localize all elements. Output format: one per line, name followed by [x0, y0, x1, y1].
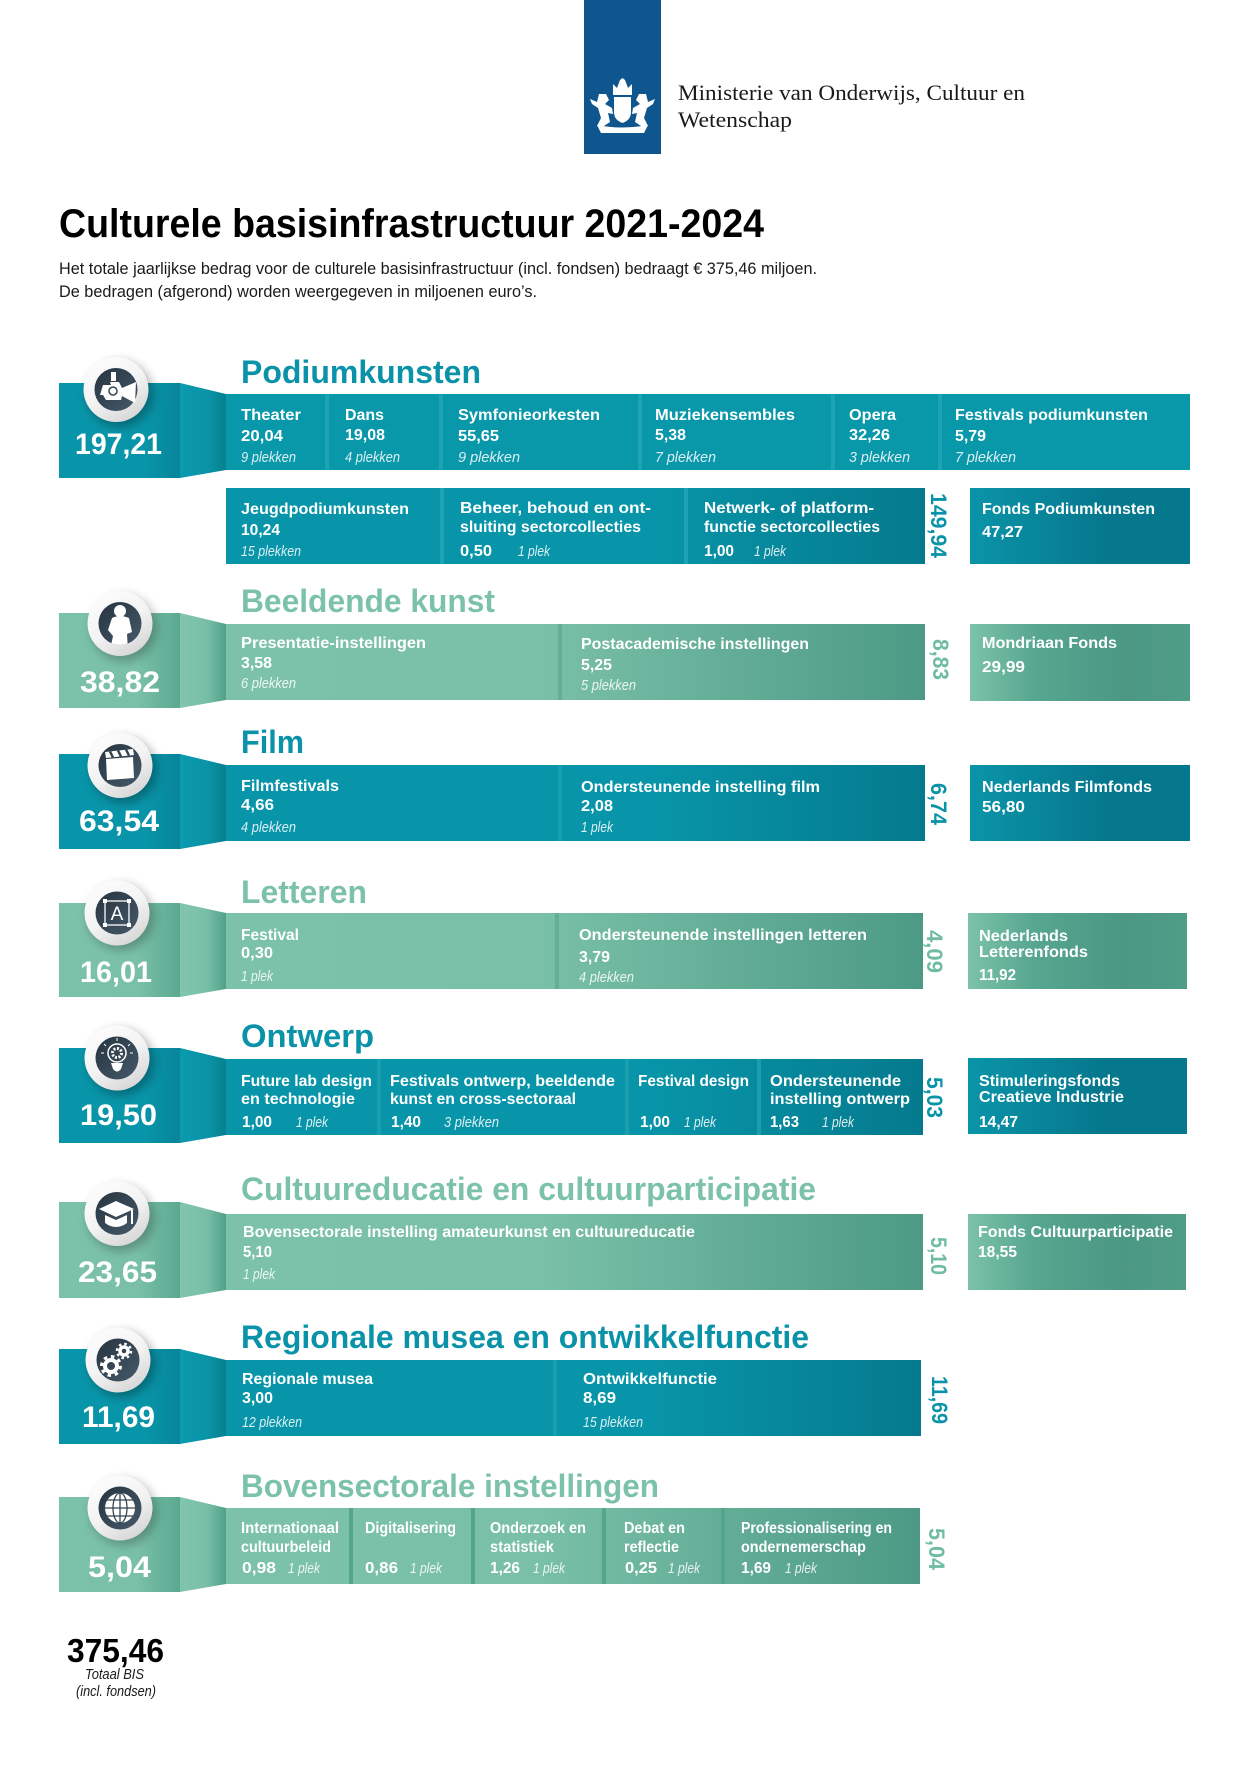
fund: Nederlands Filmfonds: Nederlands Filmfonds	[982, 779, 1152, 796]
panel: Ontwerp	[59, 1018, 1187, 1143]
ministry name: Ministerie van Onderwijs, Cultuur en	[678, 80, 1025, 105]
cell: Bovensectorale instelling	[243, 1224, 695, 1283]
fund: Nederlands Letterenfonds: 11,92	[979, 967, 1016, 984]
total: Totaal BIS: (incl. fondsen)	[76, 1683, 156, 1700]
fund: Fonds Cultuurparticipatie: 18,55	[978, 1244, 1017, 1261]
ribbon: total: 19,50	[80, 1099, 157, 1132]
cell: Festival: Festival	[241, 927, 299, 944]
fund: Fonds Podiumkunsten	[970, 488, 1190, 564]
cell: Ondersteunende instellingen letteren: 3,79	[579, 949, 610, 966]
icon: letter A frame	[84, 880, 154, 950]
panel: Regionale musea en ontwikkelfunctie	[59, 1319, 952, 1444]
ribbon: total	[59, 613, 226, 708]
bar	[226, 624, 925, 700]
fund: Fonds Podiumkunsten: Fonds Podiumkunsten	[982, 501, 1155, 518]
fund: Fonds Cultuurparticipatie: Fonds Cultuurparticipatie	[978, 1224, 1173, 1241]
subtotal: 6,74: 6,74	[926, 783, 951, 826]
cell: Ondersteunende instelling ontwerp: instelling ontwerp	[770, 1091, 910, 1108]
fund: Nederlands Filmfonds: 56,80	[982, 799, 1025, 816]
cell: Festival: 1 plek	[241, 969, 274, 985]
cell: Onderzoek en statistiek: 1,26	[490, 1560, 520, 1577]
cell: Debat en reflectie: Debat en	[624, 1520, 685, 1537]
cell: Filmfestivals: 4,66	[241, 797, 274, 814]
icon: coat of arms	[590, 78, 655, 133]
cell: Ondersteunende instelling film: Ondersteunende instelling film	[581, 779, 820, 796]
cell: Internationaal cultuurbeleid	[241, 1520, 339, 1577]
cell: Beheer, behoud en ontsluiting	[460, 500, 651, 560]
ribbon: total	[59, 1349, 226, 1444]
icon: graduation cap	[84, 1181, 154, 1251]
bar	[226, 765, 925, 841]
cell: Ontwikkelfunctie	[583, 1371, 717, 1431]
total: Totaal BIS: Totaal BIS	[85, 1666, 144, 1683]
bar	[226, 1214, 923, 1290]
heading: Podiumkunsten	[241, 354, 481, 390]
cell: Netwerk- of platformfunctie: 1 plek	[754, 544, 787, 560]
cell: Professionalisering en ondernemerschap	[741, 1520, 892, 1577]
cell: Postacademische instellingen: Postacademische instellingen	[581, 636, 809, 653]
cell: Festivals podiumkunsten: 5,79	[955, 428, 986, 445]
cell: Ondersteunende instelling film	[581, 779, 820, 836]
cell: Festival design	[638, 1073, 749, 1131]
cell: Festivals ontwerp, beeldende kunst en cross-sectoraal: Festivals ontwerp, beeldende	[390, 1073, 615, 1090]
fund: Stimuleringsfonds Creatieve Industrie: Stimuleringsfonds	[979, 1073, 1120, 1090]
cell: Filmfestivals: Filmfestivals	[241, 778, 339, 795]
fund: Stimuleringsfonds Creatieve Industrie	[968, 1058, 1187, 1134]
fund: Nederlands Letterenfonds	[968, 913, 1187, 989]
cell: Debat en reflectie: 1 plek	[668, 1561, 701, 1577]
icon: gears	[86, 1328, 155, 1397]
total: Totaal BIS	[67, 1632, 164, 1700]
cell: Festivals podiumkunsten: 7 plekken	[955, 450, 1016, 466]
cell: Digitalisering	[365, 1520, 456, 1577]
cell: Future lab design en technologie: en technologie	[241, 1091, 355, 1108]
cell: Professionalisering en ondernemerschap: Professionalisering en	[741, 1520, 892, 1537]
ribbon: total	[59, 903, 226, 997]
cell: Festivals ontwerp, beeldende kunst en cross-sectoraal: 1,40	[391, 1114, 421, 1131]
bar row 1	[226, 394, 1190, 470]
cell: Festival design: 1,00	[640, 1114, 670, 1131]
cell: Festival: 0,30	[241, 945, 273, 962]
cell: Dans: 4 plekken	[345, 450, 400, 466]
cell: Onderzoek en statistiek: statistiek	[490, 1539, 554, 1556]
cell: Ontwikkelfunctie: 8,69	[583, 1390, 616, 1407]
cell: Bovensectorale instelling: 1 plek	[243, 1267, 276, 1283]
cell: Professionalisering en ondernemerschap: 1 plek	[785, 1561, 818, 1577]
cell: Regionale musea: Regionale musea	[242, 1371, 373, 1388]
intro text: De bedragen (afgerond) worden weergegeven in miljoenen euro’s.	[59, 282, 537, 301]
panel: Film	[59, 724, 1190, 849]
ribbon: total	[59, 1497, 226, 1592]
cell: Theater	[241, 407, 301, 466]
cell: Opera	[849, 407, 910, 466]
cell: Jeugdpodiumkunsten	[241, 501, 409, 560]
cell: Festivals ontwerp, beeldende kunst en cross-sectoraal: kunst en cross-sectoraal	[390, 1091, 576, 1108]
heading: Bovensectorale instellingen	[241, 1468, 659, 1504]
ribbon: total	[59, 383, 226, 478]
subtotal: 5,03: 5,03	[922, 1077, 947, 1118]
cell: Muziekensembles: 7 plekken	[655, 450, 716, 466]
heading: Beeldende kunst	[241, 583, 495, 619]
cell: Presentatie-instellingen: 6 plekken	[241, 676, 296, 692]
cell: Beheer, behoud en ontsluiting: sluiting sectorcollecties	[460, 519, 641, 536]
cell: Opera: 3 plekken	[849, 450, 910, 466]
cell: Postacademische instellingen: 5,25	[581, 657, 612, 674]
panel: Podiumkunsten	[59, 354, 1190, 564]
cell: Ondersteunende instelling film: 2,08	[581, 798, 613, 815]
fund: Mondriaan Fonds: Mondriaan Fonds	[982, 635, 1117, 652]
cell: Professionalisering en ondernemerschap: 1,69	[741, 1560, 771, 1577]
cell: Theater: Theater	[241, 407, 301, 424]
fund: Stimuleringsfonds Creatieve Industrie: 14,47	[979, 1114, 1018, 1131]
ribbon: total	[59, 754, 226, 849]
cell: Debat en reflectie	[624, 1520, 701, 1577]
cell: Opera: Opera	[849, 407, 896, 424]
total: Totaal BIS: 375,46	[67, 1632, 164, 1669]
cell: Jeugdpodiumkunsten: 15 plekken	[241, 544, 301, 560]
cell: Jeugdpodiumkunsten: 10,24	[241, 522, 280, 539]
title: Culturele basisinfrastructuur 2021-2024	[59, 202, 765, 246]
icon: clapperboard	[88, 733, 157, 803]
cell: Ondersteunende instelling ontwerp: Ondersteunende	[770, 1073, 901, 1090]
cell: Beheer, behoud en ontsluiting: 1 plek	[518, 544, 551, 560]
cell: Ondersteunende instelling ontwerp: 1 plek	[822, 1115, 855, 1131]
cell: Regionale musea: 3,00	[242, 1390, 273, 1407]
subtotal: 5,10: 5,10	[926, 1237, 951, 1275]
cell: Jeugdpodiumkunsten: Jeugdpodiumkunsten	[241, 501, 409, 518]
bar	[226, 1360, 921, 1436]
cell: Beheer, behoud en ontsluiting: 0,50	[460, 543, 492, 560]
heading: Cultuureducatie en cultuurparticipatie	[241, 1171, 816, 1207]
cell: Future lab design en technologie: 1,00	[242, 1114, 272, 1131]
cell: Filmfestivals: 4 plekken	[241, 820, 296, 836]
cell: Onderzoek en statistiek: Onderzoek en	[490, 1520, 586, 1537]
fund: Fonds Cultuurparticipatie	[968, 1214, 1186, 1290]
cell: Theater: 20,04	[241, 428, 283, 445]
heading: Ontwerp	[241, 1018, 374, 1054]
cell: Festivals ontwerp, beeldende kunst en cross-sectoraal: 3 plekken	[444, 1115, 499, 1131]
cell: Netwerk- of platformfunctie: functie sectorcollecties	[704, 519, 880, 536]
subtotal: 11,69: 11,69	[927, 1376, 952, 1424]
heading: Film	[241, 724, 304, 760]
icon: light bulb with gear	[84, 1026, 154, 1095]
cell: Postacademische instellingen: 5 plekken	[581, 678, 636, 694]
cell: Muziekensembles	[655, 407, 795, 466]
cell: Netwerk- of platformfunctie	[704, 500, 880, 560]
cell: Festival	[241, 927, 299, 985]
cell: Muziekensembles: Muziekensembles	[655, 407, 795, 424]
cell: Ondersteunende instellingen letteren	[579, 927, 867, 986]
ribbon: total: 38,82	[80, 666, 160, 699]
ribbon: total: 16,01	[80, 956, 152, 989]
heading: Letteren	[241, 874, 367, 910]
cell: Netwerk- of platformfunctie: Netwerk- of platform-	[704, 500, 874, 517]
cell: Filmfestivals	[241, 778, 339, 836]
cell: Muziekensembles: 5,38	[655, 427, 686, 444]
fund: Nederlands Letterenfonds: Nederlands	[979, 928, 1068, 945]
cell: Ondersteunende instelling film: 1 plek	[581, 820, 614, 836]
cell: Internationaal cultuurbeleid: Internationaal	[241, 1520, 339, 1537]
cell: Future lab design en technologie: 1 plek	[296, 1115, 329, 1131]
cell: Bovensectorale instelling: Bovensectorale instelling amateurkunst en cultuureducatie	[243, 1224, 695, 1241]
heading: Regionale musea en ontwikkelfunctie	[241, 1319, 809, 1355]
cell: Digitalisering: Digitalisering	[365, 1520, 456, 1537]
ribbon: total: 197,21	[75, 428, 162, 461]
cell: Ontwikkelfunctie: Ontwikkelfunctie	[583, 1371, 717, 1388]
bar	[226, 1508, 920, 1584]
panel: Cultuureducatie en cultuurparticipatie	[59, 1171, 1186, 1298]
cell: Internationaal cultuurbeleid: 1 plek	[288, 1561, 321, 1577]
cell: Festivals podiumkunsten: Festivals podiumkunsten	[955, 407, 1148, 424]
ribbon: total: 11,69	[82, 1401, 155, 1434]
cell: Ondersteunende instelling ontwerp: 1,63	[770, 1114, 799, 1131]
cell: Digitalisering: 0,86	[365, 1560, 398, 1577]
icon: globe	[88, 1476, 157, 1545]
cell: Internationaal cultuurbeleid: cultuurbeleid	[241, 1539, 331, 1556]
icon: statue	[88, 591, 157, 661]
cell: Presentatie-instellingen	[241, 635, 426, 692]
panel: Beeldende kunst	[59, 583, 1190, 708]
cell: Postacademische instellingen	[581, 636, 809, 694]
cell: Future lab design en technologie	[241, 1073, 372, 1131]
icon: letter A frame: A	[111, 904, 124, 925]
cell: Ontwikkelfunctie: 15 plekken	[583, 1415, 643, 1431]
cell: Symfonieorkesten: Symfonieorkesten	[458, 407, 600, 424]
fund: Mondriaan Fonds	[970, 624, 1190, 701]
cell: Onderzoek en statistiek	[490, 1520, 586, 1577]
fund: Nederlands Letterenfonds: Letterenfonds	[979, 944, 1088, 961]
ministry name	[678, 80, 1025, 132]
cell: Internationaal cultuurbeleid: 0,98	[242, 1560, 276, 1577]
fund: Mondriaan Fonds: 29,99	[982, 659, 1025, 676]
logo: Rijksoverheid blue ribbon with coat of arms	[584, 0, 661, 154]
cell: Festivals ontwerp, beeldende kunst en cross-sectoraal	[390, 1073, 615, 1131]
cell: Festivals podiumkunsten	[955, 407, 1148, 466]
cell: Professionalisering en ondernemerschap: ondernemerschap	[741, 1539, 866, 1556]
cell: Festival design: Festival design	[638, 1073, 749, 1090]
cell: Dans: 19,08	[345, 427, 385, 444]
cell: Symfonieorkesten	[458, 407, 600, 466]
cell: Netwerk- of platformfunctie: 1,00	[704, 543, 734, 560]
ribbon: total: 63,54	[79, 805, 159, 838]
cell: Ondersteunende instellingen letteren: Ondersteunende instellingen letteren	[579, 927, 867, 944]
ribbon: total	[59, 1048, 226, 1143]
intro text	[59, 259, 817, 301]
fund: Stimuleringsfonds Creatieve Industrie: Creatieve Industrie	[979, 1089, 1124, 1106]
cell: Debat en reflectie: 0,25	[625, 1560, 657, 1577]
cell: Beheer, behoud en ontsluiting: Beheer, behoud en ont-	[460, 500, 651, 517]
bar	[226, 913, 923, 989]
cell: Dans: Dans	[345, 407, 384, 424]
panel: Letteren	[59, 874, 1187, 997]
cell: Onderzoek en statistiek: 1 plek	[533, 1561, 566, 1577]
bar	[226, 1059, 923, 1135]
ribbon: total	[59, 1202, 226, 1298]
cell: Ondersteunende instellingen letteren: 4 plekken	[579, 970, 634, 986]
cell: Symfonieorkesten: 9 plekken	[458, 450, 520, 466]
ribbon: total: 23,65	[78, 1256, 157, 1289]
panel: Bovensectorale instellingen	[59, 1468, 949, 1592]
subtotal: 5,04: 5,04	[924, 1528, 949, 1571]
cell: Ondersteunende instelling ontwerp	[770, 1073, 910, 1131]
cell: Future lab design en technologie: Future lab design	[241, 1073, 372, 1090]
cell: Opera: 32,26	[849, 427, 890, 444]
ministry name: Wetenschap	[678, 107, 792, 132]
cell: Festival design: 1 plek	[684, 1115, 717, 1131]
cell: Presentatie-instellingen: Presentatie-instellingen	[241, 635, 426, 652]
cell: Bovensectorale instelling: 5,10	[243, 1244, 272, 1261]
subtotal: 149,94: 149,94	[926, 493, 951, 559]
cell: Symfonieorkesten: 55,65	[458, 428, 499, 445]
intro text: Het totale jaarlijkse bedrag voor de culturele basisinfrastructuur (incl. fondsen) bedraagt € 375,46 miljoen.	[59, 259, 817, 278]
fund: Fonds Podiumkunsten: 47,27	[982, 524, 1023, 541]
cell: Digitalisering: 1 plek	[410, 1561, 443, 1577]
cell: Theater: 9 plekken	[241, 450, 296, 466]
cell: Regionale musea: 12 plekken	[242, 1415, 302, 1431]
cell: Dans	[345, 407, 400, 466]
cell: Regionale musea	[242, 1371, 373, 1431]
bar row 2	[226, 488, 925, 564]
cell: Debat en reflectie: reflectie	[624, 1539, 679, 1556]
cell: Presentatie-instellingen: 3,58	[241, 655, 272, 672]
ribbon: total: 5,04	[88, 1551, 151, 1584]
subtotal: 4,09: 4,09	[922, 930, 947, 973]
subtotal: 8,83: 8,83	[928, 639, 953, 680]
icon: spotlight	[84, 357, 153, 427]
fund: Nederlands Filmfonds	[970, 765, 1190, 841]
